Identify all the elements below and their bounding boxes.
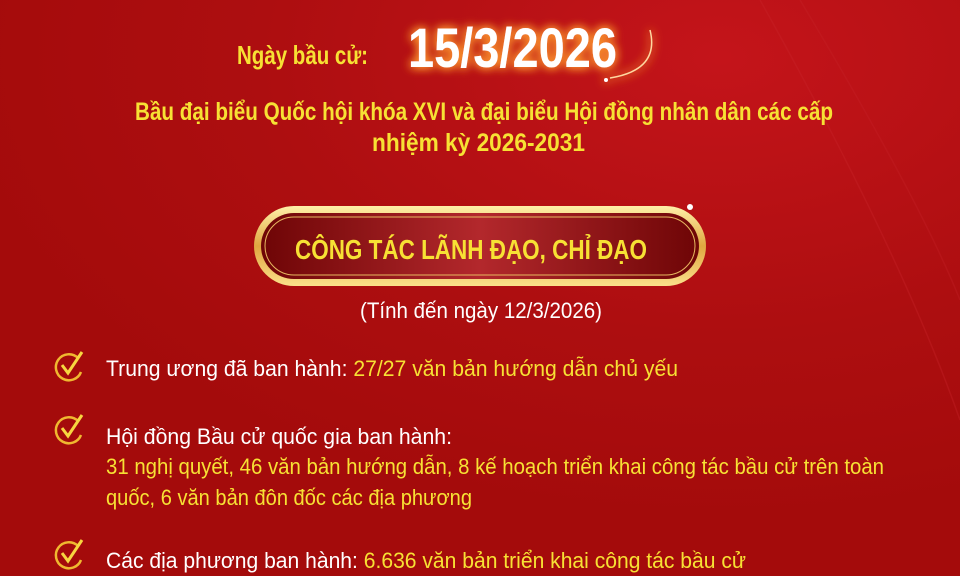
- icon: check: [56, 540, 82, 568]
- date note: (Tính đến ngày 12/3/2026): [360, 298, 602, 323]
- subtitle: nhiệm kỳ 2026-2031: [372, 129, 585, 157]
- election date label: Ngày bầu cử:: [237, 40, 368, 70]
- subtitle: Bầu đại biểu Quốc hội khóa XVI và đại biểu Hội đồng nhân dân các cấp: [135, 98, 833, 126]
- item 3: [56, 540, 746, 573]
- election date: 15/3/2026: [408, 16, 617, 79]
- item 1: Trung ương đã ban hành: 27/27 văn bản hướng dẫn chủ yếu: [106, 356, 678, 381]
- item 2: 31 nghị quyết, 46 văn bản hướng dẫn, 8 kế hoạch triển khai công tác bầu cử trên toàn: [106, 454, 884, 479]
- item 2: [56, 415, 884, 510]
- icon: check: [56, 415, 82, 443]
- icon: check: [56, 352, 82, 380]
- subtitle: [135, 98, 833, 157]
- item 2: Hội đồng Bầu cử quốc gia ban hành:: [106, 424, 452, 449]
- item 3: Các địa phương ban hành: 6.636 văn bản triển khai công tác bầu cử: [106, 548, 746, 573]
- heading button: [254, 204, 706, 286]
- heading button: CÔNG TÁC LÃNH ĐẠO, CHỈ ĐẠO: [295, 233, 647, 265]
- item 2: quốc, 6 văn bản đôn đốc các địa phương: [106, 485, 472, 510]
